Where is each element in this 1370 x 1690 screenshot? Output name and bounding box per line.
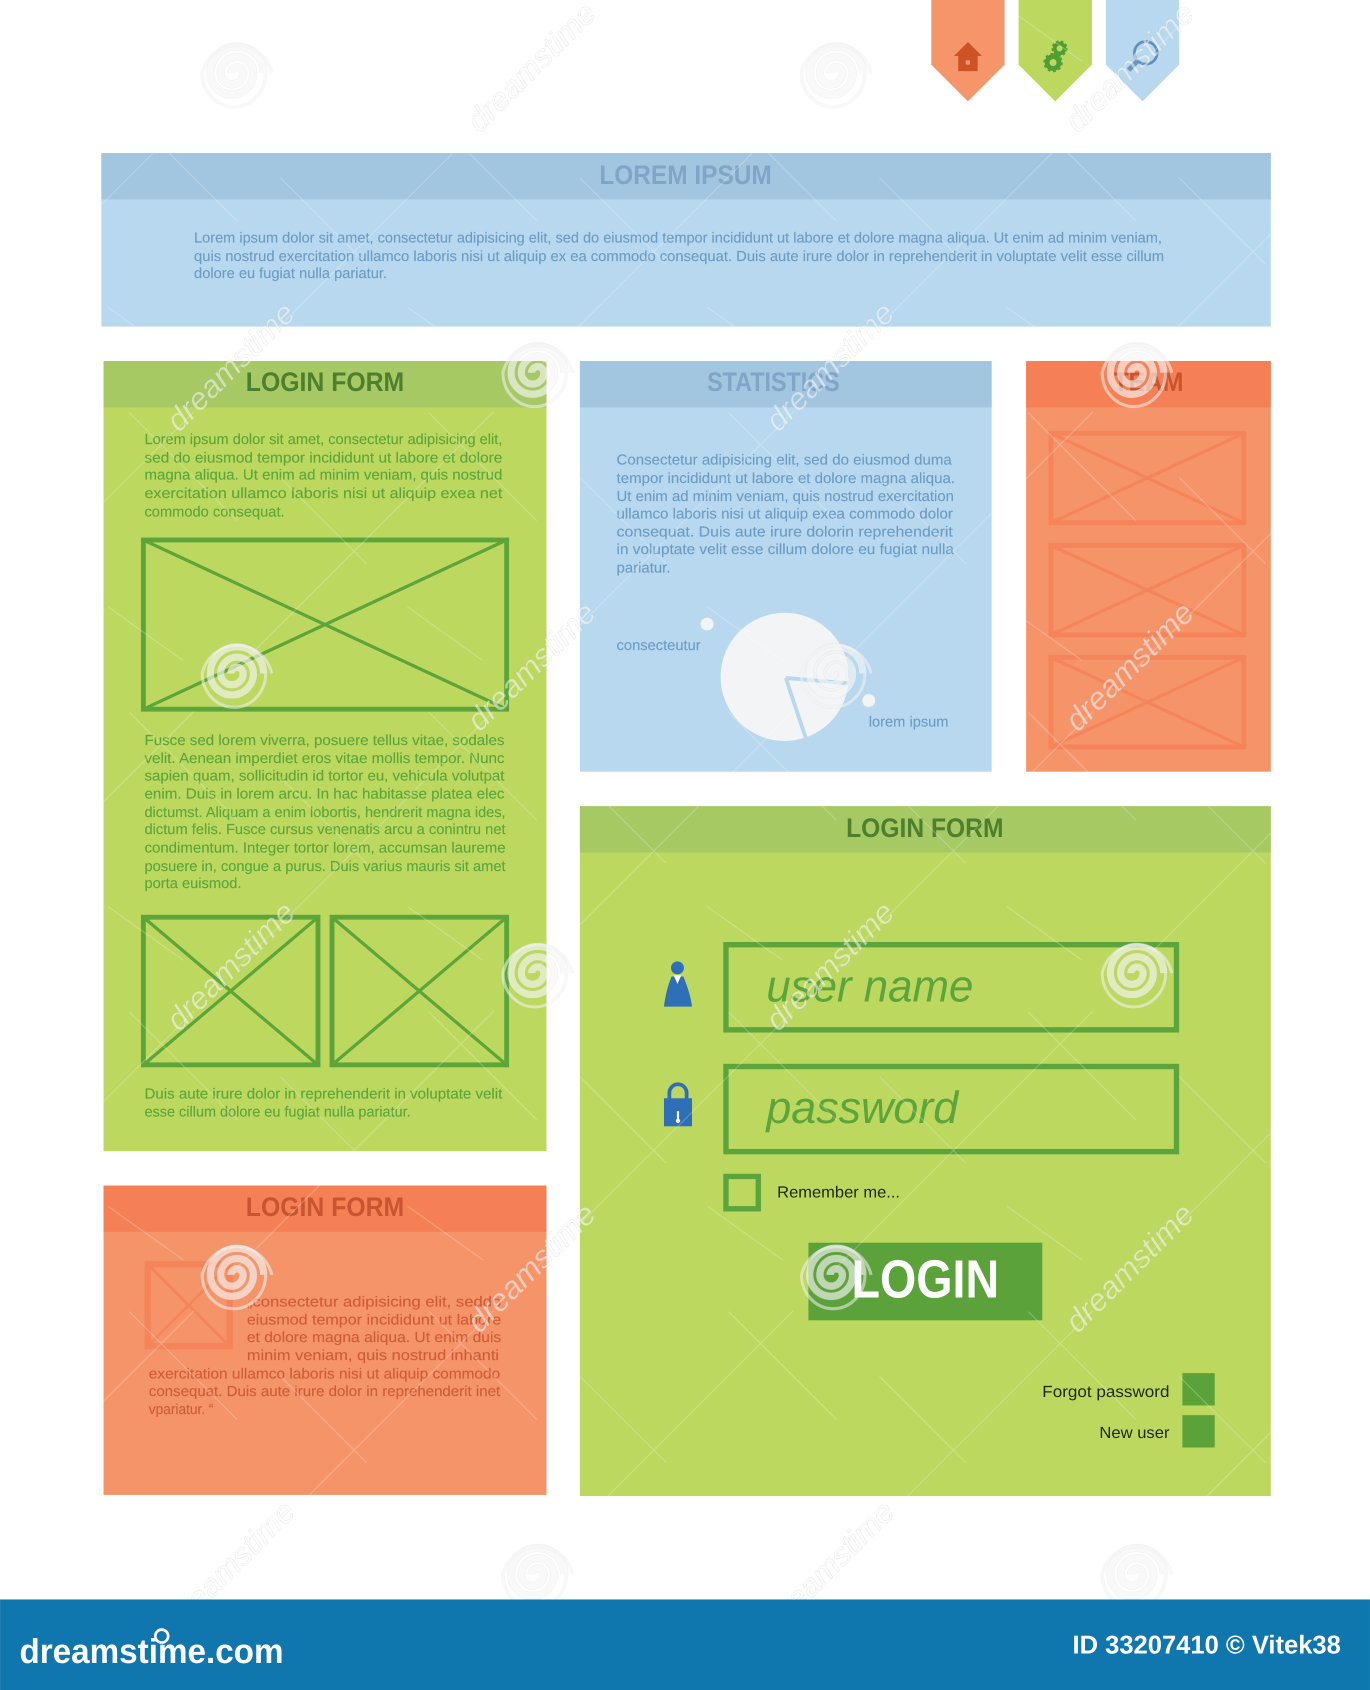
text block: first paragraph: exercitation ullamco laboris nisi ut aliquip exea net	[144, 485, 503, 501]
text block: statistics copy: Ut enim ad minim veniam, quis nostrud exercitation	[617, 488, 954, 504]
link: forgot password: Forgot password	[1042, 1383, 1169, 1401]
watermark overlay: dreamstime	[759, 895, 902, 1038]
text block: second paragraph: dictum felis. Fusce cursus venenatis arcu a conintru net	[144, 821, 506, 837]
image placeholder: team 2	[1051, 545, 1244, 635]
watermark overlay: dreamstime	[759, 296, 902, 439]
image placeholder: large	[143, 540, 507, 709]
text block: quote: exercitation ullamco laboris nisi ut aliquip commodo	[149, 1366, 500, 1382]
image placeholder: small right	[332, 917, 507, 1065]
text block: intro: Lorem ipsum dolor sit amet, consectetur adipisicing elit, sed do eiusmod tempor incididunt ut labore et dolore magna aliqua. Ut enim ad minim veniam,	[194, 230, 1162, 246]
image placeholder: small left	[143, 917, 318, 1065]
text block: quote: minim veniam, quis nostrud inhanti	[247, 1347, 499, 1363]
text block: first paragraph: commodo consequat.	[144, 503, 285, 520]
text block: quote: consequat. Duis aute irure dolor in reprehenderit inet	[149, 1383, 500, 1399]
watermark overlay: dreamstime	[1059, 0, 1201, 139]
navigation tab: settings	[1019, 0, 1092, 101]
input: password: password	[764, 1082, 960, 1133]
link: new user: New user	[1099, 1424, 1169, 1442]
heading: login form: LOGIN FORM	[246, 368, 404, 398]
button: login: LOGIN	[852, 1249, 999, 1310]
link: new user	[1099, 1415, 1215, 1447]
panel: orange quote	[104, 1186, 547, 1495]
heading: team: TEAM	[1113, 368, 1183, 398]
text block: third paragraph: Duis aute irure dolor in reprehenderit in voluptate velit	[144, 1085, 503, 1102]
text block: second paragraph: porta euismod.	[144, 875, 241, 891]
navigation tab: search	[1106, 0, 1179, 101]
label: consecteutur: consecteutur	[617, 637, 701, 653]
legend dot: lorem ipsum	[862, 694, 875, 707]
footer credit: ID 33207410 © Vitek38	[1072, 1631, 1341, 1660]
footer bar	[0, 1599, 1370, 1690]
text block: first paragraph: Lorem ipsum dolor sit amet, consectetur adipisicing elit,	[144, 431, 502, 447]
input: user name	[726, 945, 1176, 1030]
text block: statistics copy	[617, 452, 955, 576]
panel: team	[1026, 361, 1271, 772]
text block: statistics copy: Consectetur adipisicing elit, sed do eiusmod duma	[617, 452, 952, 468]
icon: house	[954, 42, 982, 71]
input: user name: user name	[766, 960, 973, 1011]
link: forgot password	[1042, 1373, 1215, 1405]
legend dot: consecteutur	[701, 618, 714, 631]
text block: first paragraph: magna aliqua. Ut enim ad minim veniam, quis nostrud	[144, 467, 502, 483]
text block: second paragraph: enim. Duis in lorem arcu. In hac habitasse platea elec	[144, 786, 505, 802]
text block: intro	[194, 230, 1164, 281]
watermark overlay: dreamstime	[1059, 1197, 1201, 1340]
text block: second paragraph: condimentum. Integer tortor lorem, accumsan laureme	[144, 840, 506, 856]
text block: third paragraph: esse cillum dolore eu fugiat nulla pariatur.	[144, 1104, 411, 1120]
label: lorem ipsum: lorem ipsum	[869, 714, 949, 730]
text block: first paragraph: sed do eiusmod tempor incididunt ut labore et dolore	[144, 449, 502, 466]
text block: third paragraph	[144, 1085, 503, 1120]
text block: first paragraph	[144, 431, 503, 520]
text block: statistics copy: consequat. Duis aute irure dolorin reprehenderit	[617, 524, 953, 540]
panel: lorem ipsum banner	[101, 153, 1271, 327]
text block: statistics copy: ullamco laboris nisi ut aliquip exea commodo dolor	[617, 505, 953, 522]
text block: quote	[149, 1293, 502, 1417]
watermark overlay: dreamstime	[461, 1197, 603, 1340]
checkbox: remember me: Remember me...	[777, 1183, 900, 1202]
panel: left login form article	[104, 361, 547, 1151]
watermark overlay: dreamstime	[1059, 596, 1201, 738]
panel: login form	[580, 806, 1271, 1496]
text block: second paragraph: dictumst. Aliquam a enim lobortis, hendrerit magna ides,	[144, 804, 506, 820]
text block: second paragraph: posuere in, congue a purus. Duis varius mauris sit amet	[144, 858, 506, 874]
text block: quote: eiusmod tempor incididunt ut labore	[247, 1312, 501, 1328]
text block: quote: et dolore magna aliqua. Ut enim duis	[247, 1329, 502, 1345]
text block: second paragraph: velit. Aenean imperdiet eros vitae mollis tempor. Nunc	[144, 750, 505, 766]
text block: statistics copy: pariatur.	[617, 559, 670, 576]
text block: statistics copy: tempor incididunt ut labore et dolore magna aliqua.	[617, 470, 955, 486]
checkbox: remember me	[726, 1176, 900, 1209]
panel: statistics	[580, 361, 992, 772]
icon: user	[664, 961, 692, 1007]
image placeholder: team 1	[1051, 433, 1244, 523]
text block: quote: „consectetur adipisicing elit, seddo	[247, 1293, 501, 1310]
image placeholder: team 3	[1051, 657, 1244, 747]
watermark overlay: dreamstime	[160, 296, 302, 439]
icon: gears	[1044, 41, 1067, 71]
text block: statistics copy: in voluptate velit esse cillum dolore eu fugiat nulla	[617, 541, 954, 557]
text block: second paragraph: sapien quam, sollicitudin id tortor eu, vehicula volutpat	[144, 767, 505, 784]
icon: magnifier	[1129, 41, 1157, 70]
watermark overlay: dreamstime	[160, 895, 302, 1038]
watermark overlay: dreamstime	[461, 0, 603, 139]
watermark overlay: dreamstime	[759, 1495, 902, 1637]
text block: second paragraph	[144, 732, 506, 891]
heading: lorem ipsum: LOREM IPSUM	[599, 160, 772, 190]
footer logo: dreamstime.com	[19, 1632, 284, 1671]
button: login	[808, 1243, 1042, 1320]
heading: login form orange: LOGIN FORM	[246, 1192, 404, 1222]
input: password	[726, 1066, 1176, 1152]
pie chart	[617, 613, 949, 741]
icon: lock	[664, 1084, 692, 1126]
image placeholder: quote avatar	[148, 1264, 230, 1346]
text block: intro: quis nostrud exercitation ullamco laboris nisi ut aliquip ex ea commodo consequat. Duis aute irure dolor in reprehenderit in voluptate velit esse cillum	[194, 248, 1164, 264]
watermark overlay: dreamstime	[461, 596, 603, 738]
text block: quote: vpariatur. “	[149, 1401, 213, 1417]
heading: statistics: STATISTICS	[707, 368, 840, 398]
heading: login form main: LOGIN FORM	[846, 813, 1003, 843]
watermark overlay: dreamstime	[160, 1495, 302, 1637]
text block: second paragraph: Fusce sed lorem viverra, posuere tellus vitae, sodales	[144, 732, 505, 748]
text block: intro: dolore eu fugiat nulla pariatur.	[194, 265, 387, 281]
navigation tab: home	[931, 0, 1005, 101]
